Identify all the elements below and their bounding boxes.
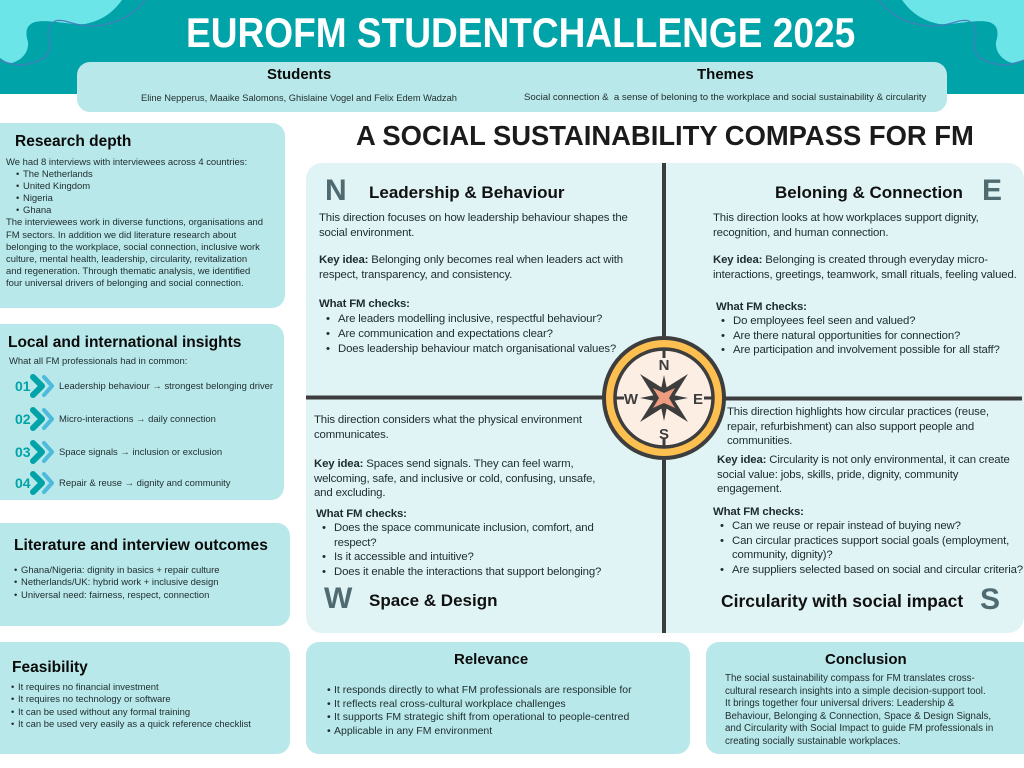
research depth text: culture, mental health, leadership, circularity, revitalization (6, 254, 247, 265)
insight 04: Repair & reuse → dignity and community (59, 478, 231, 489)
key idea: Key idea: Circularity is not only environmental, it can create (717, 454, 1010, 466)
body text: repair, refurbishment) can also support people and (727, 421, 974, 433)
panel: local and international insights (0, 324, 284, 500)
research depth text (6, 157, 263, 289)
feasibility list: It requires no technology or software (18, 694, 171, 705)
heading: Circularity with social impact (721, 591, 963, 611)
outcomes list (14, 565, 220, 601)
insight 04: 04 (15, 475, 31, 491)
insight 01: Leadership behaviour → strongest belonging driver (59, 381, 273, 392)
compass cross lines (306, 163, 1022, 633)
body text: This direction considers what the physical environment (314, 414, 582, 426)
body text: communities. (727, 435, 792, 447)
heading: conclusion: Conclusion (825, 651, 907, 668)
insight 02: 02 (15, 411, 31, 427)
body text: This direction looks at how workplaces support dignity, (713, 212, 979, 224)
heading: literature and interview outcomes: Literature and interview outcomes (14, 537, 268, 554)
checks list: Are there natural opportunities for connection? (733, 330, 960, 342)
checks list: Can we reuse or repair instead of buying new? (732, 520, 961, 532)
insight 02: Micro-interactions → daily connection (59, 414, 216, 425)
icon: compass: W (624, 391, 639, 408)
feasibility list: It can be used very easily as a quick reference checklist (18, 719, 251, 730)
relevance list: It responds directly to what FM professionals are responsible for (334, 684, 632, 696)
checks list (322, 522, 601, 578)
conclusion text: Behaviour, Belonging & Connection, Space & Design Signals, (725, 711, 991, 722)
heading: research depth: Research depth (15, 133, 131, 150)
quadrant: east, belonging and connection (713, 174, 1017, 356)
checks list (720, 520, 1023, 576)
icon: compass: N (659, 357, 669, 374)
insight 04 (15, 471, 231, 495)
checks list (722, 315, 1000, 356)
outcomes list: Ghana/Nigeria: dignity in basics + repair culture (21, 565, 220, 576)
student names: Eline Nepperus, Maaike Salomons, Ghislaine Vogel and Felix Edem Wadzah (141, 93, 457, 103)
body text (713, 212, 1017, 281)
checks list: respect? (334, 537, 376, 549)
main heading: A SOCIAL SUSTAINABILITY COMPASS FOR FM (356, 120, 974, 151)
research depth text: belonging to the workplace, social connection, inclusive work (6, 242, 260, 253)
research depth text: The interviewees work in diverse functions, organisations and (6, 217, 263, 228)
heading: students: Students (267, 66, 331, 83)
checks list: Do employees feel seen and valued? (733, 315, 915, 327)
insight 01: 01 (15, 378, 31, 394)
checks list: community, dignity)? (732, 549, 833, 561)
checks heading: What FM checks: (716, 301, 807, 313)
checks list: Are leaders modelling inclusive, respectful behaviour? (338, 313, 602, 325)
body text: welcoming, safe, and inclusive or cold, confusing, unsafe, (314, 473, 595, 485)
body text: recognition, and human connection. (713, 227, 888, 239)
letter N: N (325, 174, 347, 207)
body text: communicates. (314, 429, 389, 441)
checks list: Does the space communicate inclusion, comfort, and (334, 522, 594, 534)
insight 03: Space signals → inclusion or exclusion (59, 447, 222, 458)
title: EUROFM STUDENTCHALLENGE 2025 (186, 9, 855, 56)
conclusion text (725, 673, 993, 747)
quadrant: north, leadership and behaviour (319, 174, 628, 355)
heading: feasibility: Feasibility (12, 659, 88, 676)
icon: compass: S (659, 426, 669, 443)
panel: feasibility (0, 642, 290, 754)
feasibility list: It can be used without any formal training (18, 707, 190, 718)
relevance list: It supports FM strategic shift from operational to people-centred (334, 711, 629, 723)
checks list: Are suppliers selected based on social and circular criteria? (732, 564, 1023, 576)
letter E: E (982, 174, 1002, 207)
body text: interactions, greetings, teamwork, small rituals, feeling valued. (713, 269, 1017, 281)
conclusion text: The social sustainability compass for FM translates cross- (725, 673, 975, 684)
checks heading: What FM checks: (316, 508, 407, 520)
research depth text: four universal drivers of belonging and social connection. (6, 278, 244, 289)
conclusion text: and Circularity with Social Impact to guide FM professionals in (725, 723, 993, 734)
insights intro: What all FM professionals had in common: (9, 356, 187, 367)
research depth text: and regeneration. Through thematic analysis, we identified (6, 266, 250, 277)
key idea (717, 454, 1010, 495)
checks heading: What FM checks: (713, 506, 804, 518)
checks list: Does it enable the interactions that support belonging? (334, 566, 601, 578)
panel: compass (306, 163, 1024, 633)
panel: conclusion (706, 642, 1024, 754)
feasibility list (11, 682, 251, 730)
header decorative blobs (0, 0, 1024, 66)
insight 03: 03 (15, 444, 31, 460)
checks list: Can circular practices support social goals (employment, (732, 535, 1009, 547)
research depth text: FM sectors. In addition we did literature research about (6, 230, 236, 241)
icon: compass (602, 336, 726, 460)
heading: relevance: Relevance (454, 651, 528, 668)
conclusion text: It brings together four universal drivers: Leadership & (725, 698, 954, 709)
panel: relevance (306, 642, 690, 754)
conclusion text: cultural research insights into a simple decision-support tool. (725, 686, 986, 697)
body text (319, 212, 628, 310)
research depth text: Nigeria (23, 193, 53, 204)
insight 03 (15, 440, 222, 464)
insight 02 (15, 407, 216, 431)
body text (727, 406, 989, 447)
quadrant: west, space and design (314, 414, 601, 615)
heading: Leadership & Behaviour (369, 183, 565, 202)
insight 01 (15, 374, 273, 398)
heading: Space & Design (369, 591, 498, 610)
body text: respect, transparency, and consistency. (319, 269, 512, 281)
checks list: Is it accessible and intuitive? (334, 551, 474, 563)
body text: Key idea: Belonging only becomes real when leaders act with (319, 254, 623, 266)
checks list (326, 313, 616, 355)
research depth text: We had 8 interviews with interviewees across 4 countries: (6, 157, 247, 168)
research depth text: The Netherlands (23, 169, 93, 180)
heading: themes: Themes (697, 66, 754, 83)
outcomes list: Universal need: fairness, respect, connection (21, 590, 209, 601)
body text: This direction focuses on how leadership behaviour shapes the (319, 212, 628, 224)
body text: This direction highlights how circular practices (reuse, (727, 406, 989, 418)
relevance list (327, 684, 632, 736)
panel: research depth (0, 123, 285, 308)
relevance list: Applicable in any FM environment (334, 724, 492, 736)
checks list: Are communication and expectations clear? (338, 328, 553, 340)
relevance list: It reflects real cross-cultural workplace challenges (334, 698, 566, 710)
letter W: W (324, 582, 352, 615)
conclusion text: creating socially sustainable workplaces. (725, 736, 901, 747)
body text: and excluding. (314, 487, 385, 499)
checks list: Are participation and involvement possible for all staff? (733, 344, 1000, 356)
body text: Key idea: Belonging is created through everyday micro- (713, 254, 988, 266)
heading: Beloning & Connection (775, 183, 963, 202)
key idea: social value: jobs, skills, pride, dignity, community (717, 469, 958, 481)
checks list: Does leadership behaviour match organisational values? (338, 343, 616, 355)
header band (0, 0, 1024, 94)
panel: students and themes (77, 62, 947, 112)
body text: Key idea: Spaces send signals. They can feel warm, (314, 458, 573, 470)
letter S: S (980, 583, 1000, 616)
feasibility list: It requires no financial investment (18, 682, 159, 693)
icon: compass: E (693, 391, 703, 408)
body text: social environment. (319, 227, 414, 239)
body text: What FM checks: (319, 298, 410, 310)
quadrant: south, circularity with social impact (713, 406, 1023, 616)
outcomes list: Netherlands/UK: hybrid work + inclusive design (21, 577, 218, 588)
research depth text: Ghana (23, 205, 51, 216)
heading: local and international insights: Local and international insights (8, 334, 241, 351)
themes text: Social connection & a sense of beloning to the workplace and social sustainability & circularity (524, 92, 926, 103)
body text (314, 414, 595, 499)
panel: literature and interview outcomes (0, 523, 290, 626)
research depth text: United Kingdom (23, 181, 90, 192)
key idea: engagement. (717, 483, 782, 495)
